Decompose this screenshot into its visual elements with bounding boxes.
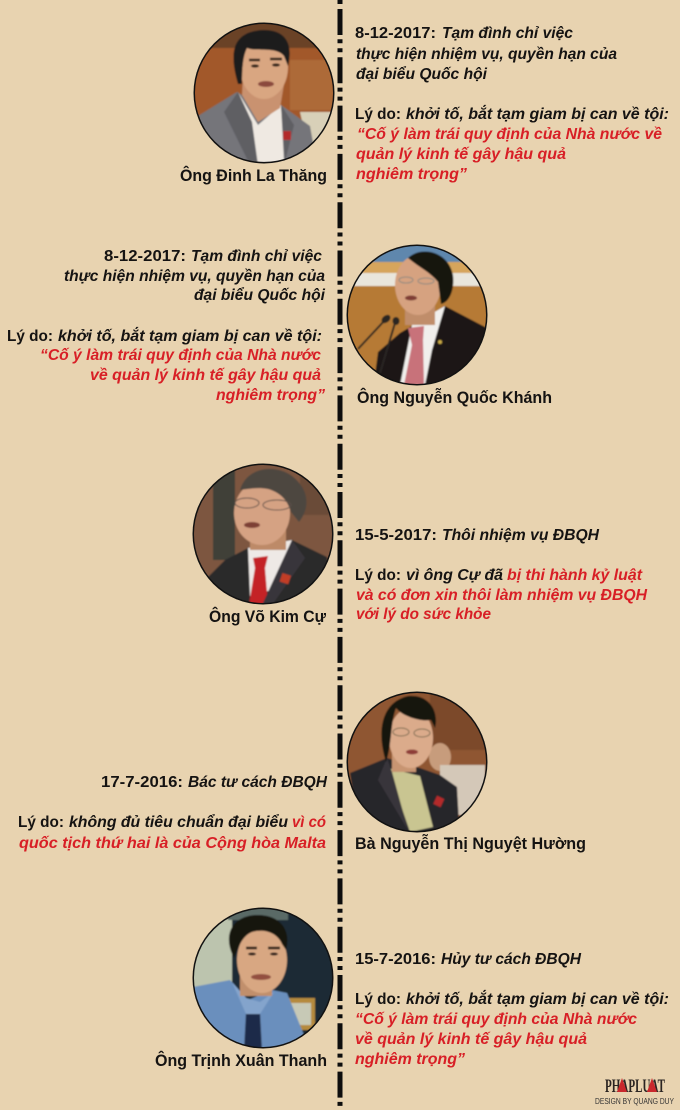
text block: decision and reason: bị thi hành kỷ luật [507,567,643,584]
text block: decision and reason: Bác tư cách ĐBQH [188,774,327,791]
name: Ong Vo Kim Cu: Ông Võ Kim Cự [209,607,327,626]
text block: decision and reason: Hủy tư cách ĐBQH [441,951,581,968]
text block: decision and reason: Tạm đình chỉ việc [442,25,573,42]
text block: decision and reason [355,527,647,623]
text block: decision and reason: với lý do sức khỏe [356,606,491,623]
text block: decision and reason: về quản lý kinh tế gây hậu quả [355,1031,587,1048]
text block: decision and reason: Lý do: [355,106,401,123]
panel: Trinh Xuan Thanh [155,905,669,1070]
name: Ong Nguyen Quoc Khanh: Ông Nguyễn Quốc Khánh [357,388,552,407]
panel: Nguyen Thi Nguyet Huong [18,690,586,853]
text block: decision and reason [18,774,327,852]
logo: Phap Luat [595,1076,674,1106]
text block: decision and reason: nghiêm trọng” [356,166,467,183]
text block: decision and reason: quốc tịch thứ hai là của Cộng hòa Malta [19,835,326,852]
text block: decision and reason: Tạm đình chỉ việc [191,248,322,265]
text block: decision and reason: khởi tố, bắt tạm giam bị can về tội: [58,326,322,345]
text block: decision and reason: khởi tố, bắt tạm giam bị can về tội: [406,104,669,123]
text block: decision and reason: Lý do: [355,991,401,1008]
text block: decision and reason: đại biểu Quốc hội [356,65,488,83]
text block: decision and reason: 8-12-2017: [104,248,186,265]
portrait: Nguyen Quoc Khanh [346,244,488,386]
text block: decision and reason: khởi tố, bắt tạm giam bị can về tội: [406,989,669,1008]
panel: Nguyen Quoc Khanh [7,240,552,407]
name: Ong Trinh Xuan Thanh: Ông Trịnh Xuân Thanh [155,1051,327,1070]
text block: decision and reason: thực hiện nhiệm vụ, quyền hạn của [64,268,325,285]
text block: decision and reason [355,25,669,183]
text block: decision and reason [355,951,669,1068]
name: Ba Nguyen Thi Nguyet Huong: Bà Nguyễn Thị Nguyệt Hường [355,834,586,853]
text block: decision and reason: 17-7-2016: [101,774,183,791]
text block: decision and reason: Lý do: [355,567,401,584]
text block: decision and reason: 15-5-2017: [355,527,437,544]
portrait: Nguyen Thi Nguyet Huong [346,692,488,832]
portrait: Trinh Xuan Thanh [192,908,334,1048]
text block: decision and reason: không đủ tiêu chuẩn đại biểu [69,813,288,831]
text block: decision and reason: về quản lý kinh tế gây hậu quả [90,367,321,384]
text block: decision and reason: 15-7-2016: [355,951,436,968]
text block: decision and reason: nghiêm trọng” [355,1051,465,1068]
name: Ong Dinh La Thang: Ông Đinh La Thăng [180,166,327,185]
text block: decision and reason: “Cố ý làm trái quy định của Nhà nước [40,347,321,364]
text block: decision and reason: vì có [292,814,326,831]
text block: decision and reason: vì ông Cự đã [406,567,503,584]
panel: Dinh La Thang [180,20,669,185]
portrait: Dinh La Thang [194,22,334,164]
text block: decision and reason: “Cố ý làm trái quy định của Nhà nước [355,1011,637,1028]
panel: Vo Kim Cu [190,460,647,626]
text block: decision and reason: Thôi nhiệm vụ ĐBQH [442,527,599,544]
text block: decision and reason: thực hiện nhiệm vụ, quyền hạn của [356,46,617,63]
text block: decision and reason: 8-12-2017: [355,25,436,42]
text block: decision and reason: quản lý kinh tế gây hậu quả [356,146,566,163]
text block: decision and reason: “Cố ý làm trái quy định của Nhà nước về [357,126,662,143]
text block: decision and reason: đại biểu Quốc hội [194,286,326,304]
portrait: Vo Kim Cu [192,464,334,604]
text block: decision and reason: Lý do: [18,814,64,831]
text block: decision and reason: nghiêm trọng” [216,387,325,404]
text block: decision and reason: và có đơn xin thôi làm nhiệm vụ ĐBQH [356,587,647,604]
timeline dashed line [338,0,342,1108]
text block: decision and reason [7,248,326,404]
text block: decision and reason: Lý do: [7,328,53,345]
